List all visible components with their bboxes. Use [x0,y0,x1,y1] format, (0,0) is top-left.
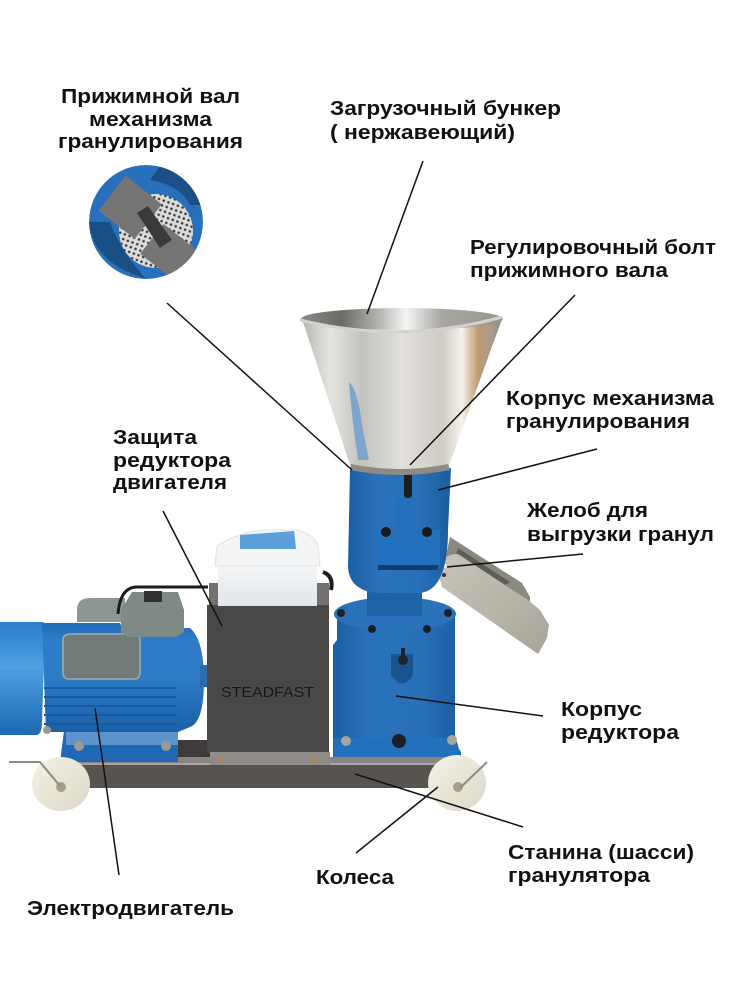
machine: pellet mill [0,308,549,811]
label: pelletizer housing: Корпус механизма [506,388,715,410]
label: pelletizer housing [506,388,715,433]
guard bolts [218,756,318,762]
label: gearbox housing [561,699,680,744]
label: chassis: Станина (шасси) [508,842,694,864]
discharge chute [438,537,549,654]
motor cooling fins [44,688,176,724]
adjusting bolt [404,458,412,498]
wheel left [9,757,90,811]
housing bolts [381,527,432,537]
label: chassis [508,842,694,887]
label: press roller [58,86,243,153]
label: chute: Желоб для [526,500,648,522]
gearbox top [334,597,456,631]
label: pelletizer housing: гранулирования [506,411,690,433]
label: wheels: Колеса [316,867,395,889]
chute rear plate [446,537,530,606]
motor foot bolts [43,726,171,751]
label: adjusting bolt: прижимного вала [470,260,669,282]
pelletizer housing [348,458,451,593]
stainless steel hopper [300,308,503,475]
hopper rim [301,308,503,330]
label: gearbox housing: редуктора [561,722,680,744]
chute front plate [438,554,549,654]
gearbox bolts [337,609,452,748]
label: gearbox housing: Корпус [561,699,642,721]
hopper lower welded rim [350,464,450,475]
infographic: pellet mill diagram [0,88,716,919]
motor cable [118,587,208,614]
gearbox oil plug [391,648,413,684]
gearbox foot [333,738,461,757]
label: chute: выгрузки гранул [527,524,714,546]
inset shaft [137,206,172,248]
label: press roller: Прижимной вал [61,86,240,108]
control box [215,530,332,606]
label: motor reducer guard: двигателя [113,472,227,494]
label: press roller: гранулирования [58,131,243,153]
gearbox neck [367,586,422,616]
guard logo: STEADFAST [221,684,314,701]
label: hopper [330,98,561,144]
label: motor reducer guard [113,427,232,494]
electric motor [0,587,208,762]
label: chute [526,500,714,546]
label: hopper: ( нержавеющий) [330,122,515,144]
chassis frame [62,740,462,788]
motor body [42,623,204,732]
label: adjusting bolt: Регулировочный болт [470,237,716,259]
label: hopper: Загрузочный бункер [330,98,561,120]
label: electric motor: Электродвигатель [27,898,234,920]
label: press roller: механизма [89,109,213,131]
inset: press roller photo [89,165,203,282]
gearbox housing [333,586,461,757]
grey back cover [77,598,125,622]
inset perforated die [119,194,193,268]
wheel right [428,755,487,811]
label: chassis: гранулятора [508,865,651,887]
capacitor cover [63,634,140,679]
junction box [121,592,184,637]
motor shaft [200,665,208,687]
gear motor guard housing [207,583,330,765]
housing bracket [376,497,440,565]
label: motor reducer guard: Защита [113,427,198,449]
inset rollers [98,176,196,275]
control box display [240,531,296,549]
motor foot [60,731,178,762]
motor fan cover [0,622,46,735]
label: motor reducer guard: редуктора [113,450,232,472]
leader lines [95,161,597,875]
label: adjusting bolt [470,237,716,282]
hopper blue reflection [349,382,369,460]
